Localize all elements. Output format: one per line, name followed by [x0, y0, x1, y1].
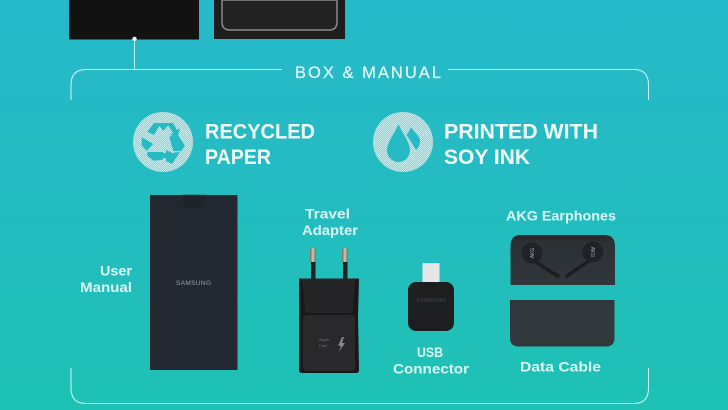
akg earphones label: AKG Earphones: [506, 208, 616, 224]
black box: [69, 0, 199, 40]
usb connector: [408, 263, 454, 331]
icon: soy ink drops: [373, 112, 433, 172]
heading: printed with soy ink: [444, 120, 598, 169]
usb connector label: Connector: [393, 360, 470, 376]
user manual label: [80, 262, 133, 295]
travel adapter label: [302, 206, 359, 238]
phone tray: [214, 0, 345, 39]
heading: recycled paper: RECYCLED: [205, 120, 315, 144]
box outline frame: [71, 70, 648, 404]
user manual label: Manual: [80, 279, 132, 295]
icon: recycling: [133, 112, 193, 172]
heading: printed with soy ink: PRINTED WITH: [444, 120, 598, 144]
connector line and dot: [132, 37, 137, 69]
travel adapter: Fast: [319, 343, 328, 348]
user manual label: User: [100, 262, 133, 278]
user manual: [150, 195, 238, 370]
akg earphones: [510, 235, 615, 285]
usb connector label: [393, 344, 470, 376]
travel adapter: [299, 248, 359, 373]
data cable: [510, 300, 614, 346]
section title: BOX & MANUAL: [295, 64, 441, 82]
usb connector: SAMSUNG: [416, 298, 446, 304]
akg earphones: AKG: [530, 248, 536, 258]
heading: recycled paper: PAPER: [205, 145, 271, 169]
travel adapter label: Adapter: [302, 222, 359, 238]
akg earphones: AKG: [589, 247, 595, 257]
travel adapter label: Travel: [305, 206, 350, 222]
user manual: SAMSUNG: [176, 280, 211, 287]
data cable label: Data Cable: [520, 358, 601, 374]
heading: printed with soy ink: SOY INK: [444, 145, 530, 169]
usb connector label: USB: [417, 344, 443, 360]
travel adapter: Super: [319, 337, 330, 342]
heading: recycled paper: [205, 120, 315, 169]
